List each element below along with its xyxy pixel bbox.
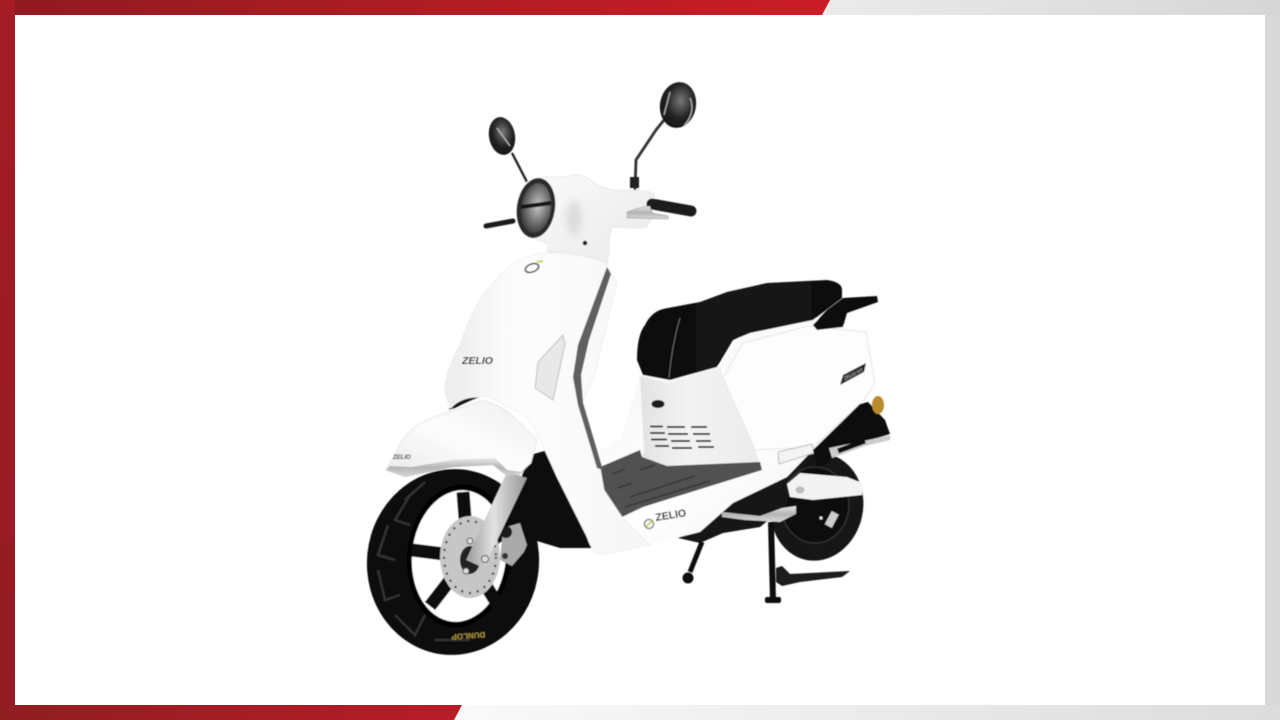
- floor ridges: [612, 465, 710, 507]
- axle bolts: [463, 538, 488, 574]
- badge on shield: [524, 261, 543, 274]
- brake disc: [440, 516, 500, 598]
- turn signal: [535, 335, 565, 400]
- underbody dark area: [505, 450, 595, 548]
- front fork: [466, 472, 527, 568]
- caliper: [500, 523, 527, 566]
- rear fender: [813, 402, 890, 467]
- tail light: [872, 396, 884, 414]
- spokes: [412, 492, 507, 606]
- tread: [378, 482, 470, 640]
- handlebar housing: [525, 175, 655, 264]
- side badge: [840, 363, 866, 385]
- rear swingarm cover: [787, 473, 862, 500]
- floor logo: [644, 507, 687, 528]
- rear rack: [813, 296, 878, 330]
- mirror mount: [630, 177, 639, 188]
- floorboard: [600, 450, 762, 517]
- left grip: [486, 221, 513, 226]
- side badge: ZELIO GT: [843, 367, 864, 381]
- tyre: [358, 461, 548, 663]
- left mirror: [486, 115, 518, 157]
- seat stitching: [669, 318, 680, 378]
- right mirror: [656, 79, 700, 131]
- seat: [637, 280, 842, 380]
- housing shading: [566, 200, 582, 236]
- side panel: [723, 326, 875, 450]
- tyre brand: DUNLOP: [451, 630, 485, 641]
- rear wheel: [761, 445, 873, 569]
- under-seat front box: [640, 367, 760, 466]
- disc holes: [444, 521, 496, 593]
- left mirror stem: [512, 153, 527, 182]
- rear body: [560, 318, 875, 555]
- floor logo: ZELIO: [655, 507, 687, 524]
- wheel arch gap: [451, 396, 480, 408]
- reflector: [778, 444, 814, 464]
- rear footpeg: [829, 435, 890, 458]
- headlight: [513, 176, 559, 240]
- neck bolt: [583, 241, 587, 245]
- vent: [650, 426, 714, 448]
- fender chrome trim: [386, 458, 531, 477]
- centre stand: [765, 522, 850, 603]
- body logo: ZELIO: [461, 355, 493, 367]
- rim: [400, 479, 518, 633]
- motor and chassis: [678, 480, 790, 543]
- right grip: [652, 204, 691, 211]
- foot lever: [722, 506, 796, 522]
- scooter: [358, 79, 890, 663]
- front wheel: [358, 461, 548, 663]
- brake lever: [627, 206, 668, 219]
- fender logo: ZELIO: [392, 455, 411, 461]
- right mirror stem: [635, 120, 664, 190]
- front shield grey stripe: [573, 267, 611, 470]
- side stand: [682, 542, 702, 584]
- front fender: [386, 400, 537, 477]
- rim opening: [405, 485, 513, 627]
- front shield: [445, 253, 650, 555]
- keyhole: [652, 400, 664, 408]
- hub: [460, 546, 480, 574]
